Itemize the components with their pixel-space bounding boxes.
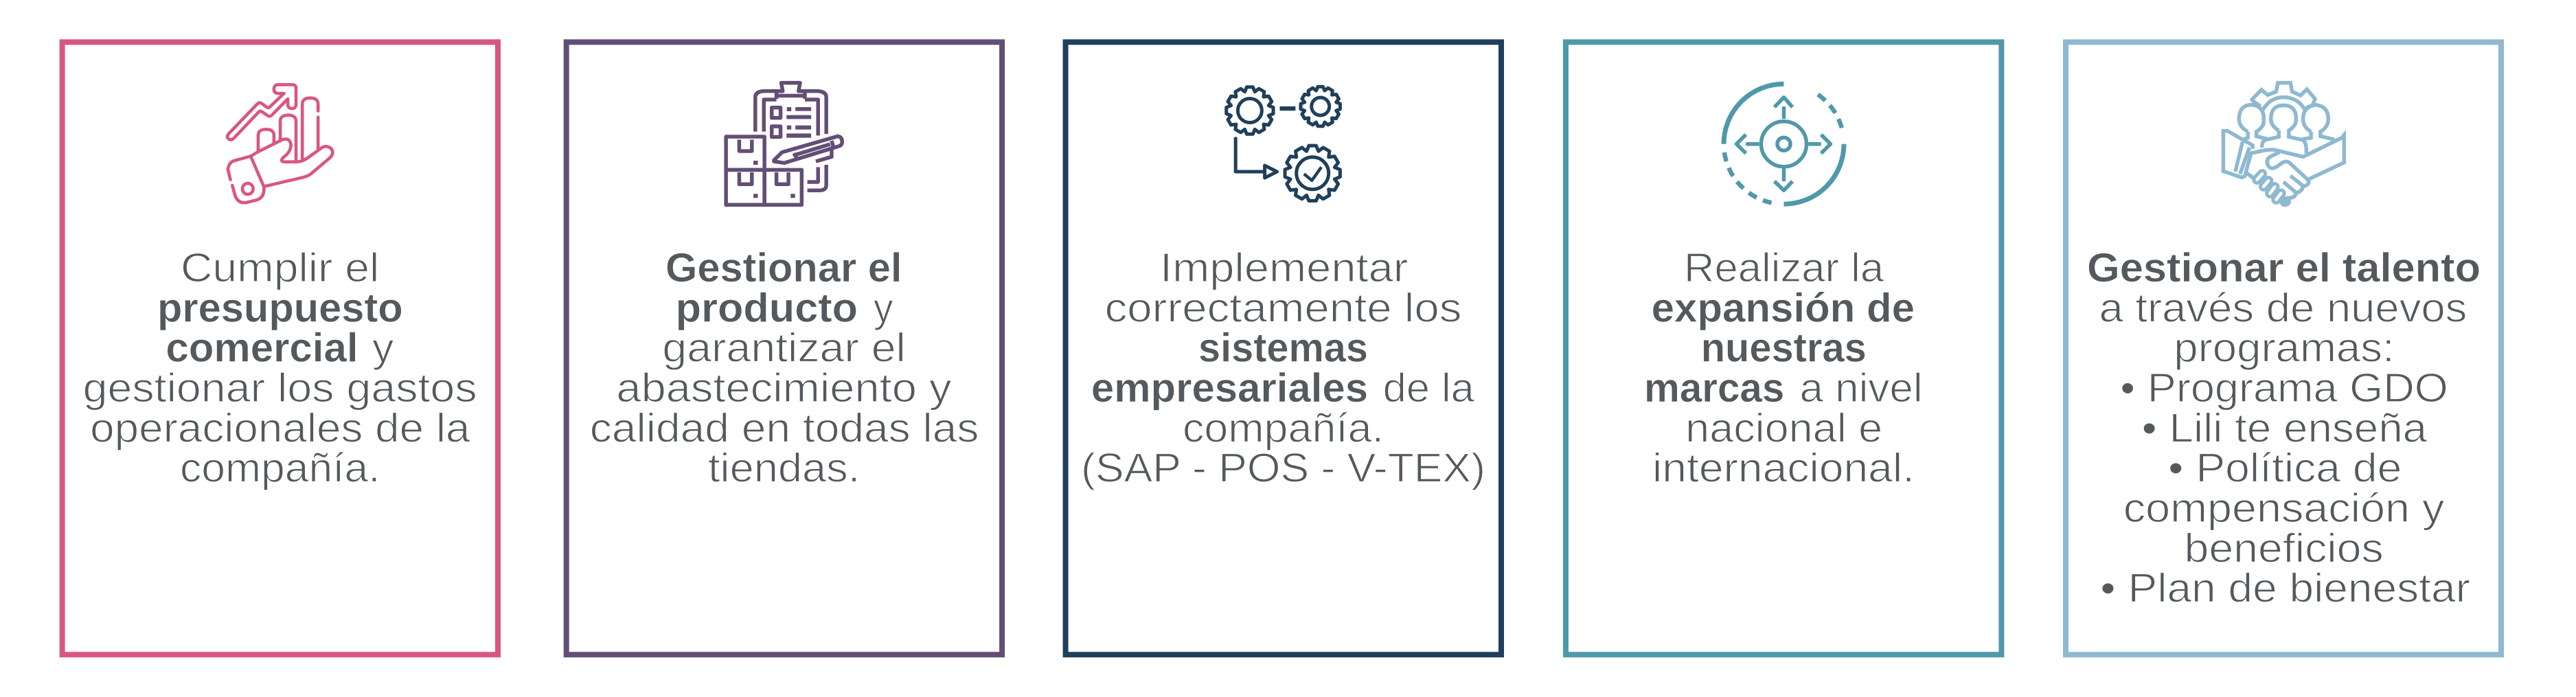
text: sistemas empresariales: [1081, 245, 1485, 491]
icon: clipboard, boxes and pencil: [726, 83, 842, 205]
text: gestionar el talento: beneficios: [2184, 525, 2384, 571]
text: gestionar el producto: y: [874, 285, 893, 330]
panel frame: teal: [1566, 42, 2001, 654]
text: presupuesto comercial: gestionar los gastos: [83, 365, 477, 411]
panel frame: pink: [62, 42, 498, 654]
panel: presupuesto comercial: [62, 42, 498, 654]
text: gestionar el producto: abastecimiento y: [616, 365, 952, 411]
panel: gestionar el talento: [2066, 42, 2501, 654]
text: gestionar el talento: [2087, 245, 2481, 611]
text: gestionar el talento: Gestionar el talento: [2087, 245, 2481, 290]
text: expansión de marcas: nuestras: [1701, 325, 1867, 371]
text: gestionar el producto: tiendas.: [708, 446, 860, 491]
text: gestionar el producto: [590, 245, 979, 491]
text: presupuesto comercial: comercial: [166, 325, 358, 371]
panel: sistemas empresariales: [1066, 42, 1501, 654]
text: sistemas empresariales: sistemas: [1198, 325, 1368, 371]
text: gestionar el talento: • Plan de bienestar: [2100, 566, 2470, 611]
text: expansión de marcas: marcas: [1644, 365, 1784, 411]
text: presupuesto comercial: presupuesto: [157, 285, 403, 330]
text: gestionar el producto: calidad en todas las: [590, 405, 979, 450]
text: expansión de marcas: nacional e: [1685, 405, 1882, 450]
panel frame: purple: [567, 42, 1002, 654]
icon: expansion target with arrows: [1724, 84, 1844, 204]
panel frame: navy: [1066, 42, 1501, 654]
text: gestionar el talento: a través de nuevos: [2099, 285, 2467, 330]
text: sistemas empresariales: (SAP - POS - V-TEX): [1081, 446, 1485, 491]
text: gestionar el talento: • Lili te enseña: [2141, 405, 2427, 450]
text: expansión de marcas: internacional.: [1652, 446, 1915, 491]
text: gestionar el talento: compensación y: [2123, 485, 2445, 531]
text: expansión de marcas: a nivel: [1799, 365, 1923, 411]
text: presupuesto comercial: Cumplir el: [181, 245, 379, 290]
text: gestionar el producto: garantizar el: [662, 325, 906, 371]
icon: gears with flow arrow and check: [1227, 87, 1340, 201]
text: expansión de marcas: expansión de: [1652, 285, 1915, 330]
text: expansión de marcas: [1644, 245, 1923, 491]
text: gestionar el talento: programas:: [2174, 325, 2395, 371]
text: sistemas empresariales: Implementar: [1160, 245, 1408, 290]
text: presupuesto comercial: [83, 245, 477, 491]
text: gestionar el talento: • Política de: [2168, 446, 2402, 491]
text: sistemas empresariales: compañía.: [1183, 405, 1384, 450]
text: presupuesto comercial: compañía.: [180, 446, 380, 491]
text: sistemas empresariales: de la: [1383, 365, 1474, 411]
text: gestionar el talento: • Programa GDO: [2120, 365, 2448, 411]
text: presupuesto comercial: y: [372, 325, 394, 371]
text: sistemas empresariales: empresariales: [1091, 365, 1368, 411]
icon: team, gear and handshake: [2223, 83, 2344, 205]
panel: gestionar el producto: [567, 42, 1002, 654]
text: sistemas empresariales: correctamente los: [1105, 285, 1461, 330]
text: presupuesto comercial: operacionales de la: [90, 405, 470, 450]
text: gestionar el producto: producto: [676, 285, 858, 330]
text: gestionar el producto: Gestionar el: [665, 245, 902, 290]
icon: hand holding growth chart: [227, 84, 332, 203]
text: expansión de marcas: Realizar la: [1684, 245, 1884, 290]
panel: expansión de marcas: [1566, 42, 2001, 654]
panel frame: light blue: [2066, 42, 2501, 654]
